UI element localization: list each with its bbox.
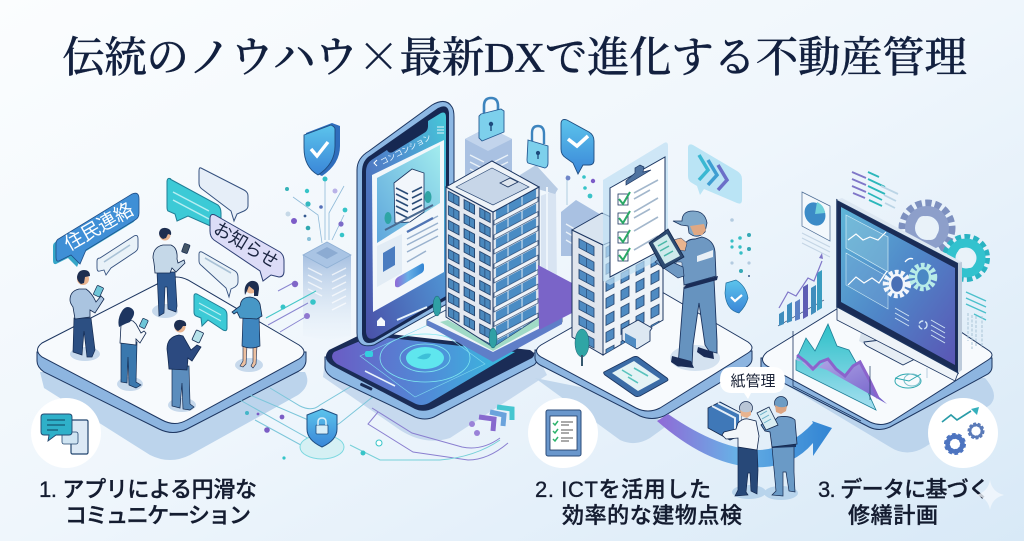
speech bubble: teal <box>167 178 221 229</box>
panel: app communication <box>31 168 307 528</box>
code lines floating <box>852 172 898 208</box>
worker in blue <box>757 396 798 500</box>
speech bubble: small left <box>97 235 138 275</box>
platform 2 shadow <box>535 378 668 443</box>
bottom workers <box>708 396 798 500</box>
phone screen building image <box>384 169 433 230</box>
worker in white <box>722 402 766 499</box>
panel: ICT inspection <box>528 142 752 528</box>
server tower <box>303 242 351 340</box>
icon: tablet checklist <box>528 398 598 468</box>
platform 3 shadow <box>783 370 994 452</box>
building 2 <box>572 213 663 366</box>
shield check right <box>725 280 748 313</box>
speech bubble: small teal <box>194 294 227 331</box>
inspection worker <box>649 211 720 371</box>
flat phone shadow <box>323 355 547 441</box>
transformation arrow <box>657 414 832 467</box>
speech bubble: light top <box>199 168 248 221</box>
platform 2 <box>535 292 752 418</box>
chevrons at bottom <box>479 407 512 431</box>
speech bubble: お知らせ: お知らせ <box>210 218 282 272</box>
icon: shield top left <box>304 123 340 176</box>
caption 3: 修繕計画 <box>848 503 938 528</box>
speech bubble: small middle <box>199 252 238 297</box>
icon: lock shield small <box>300 409 344 459</box>
circuit lines left of phone <box>240 281 508 460</box>
caption 2: 効率的な建物点検 <box>562 503 742 528</box>
person: front man <box>167 320 204 412</box>
monitor charts <box>846 215 945 343</box>
data dots and circuit above tower <box>285 176 347 243</box>
platform 3 <box>761 307 992 430</box>
monitor <box>837 198 962 381</box>
platform 1 <box>37 277 306 432</box>
bar growth chart <box>778 253 824 326</box>
title: 伝統のノウハウ×最新DXで進化する不動産管理 <box>62 24 967 85</box>
speech bubble: 住民連絡 <box>53 193 139 267</box>
dark panel behind building <box>538 265 572 330</box>
data dots right <box>730 218 751 277</box>
caption 1: コミュニケーション <box>65 503 251 528</box>
紙管理 bubble: 紙管理 <box>730 372 776 390</box>
person: woman with phone <box>117 307 148 391</box>
caption 3: 3. データに基づく <box>818 477 990 502</box>
chevron bubble <box>688 144 742 204</box>
icons: padlocks <box>479 98 548 168</box>
floor tablet <box>604 356 668 396</box>
caption 2: 2. ICTを活用した <box>535 477 711 502</box>
floor gauge <box>895 368 927 388</box>
background building behind phone <box>465 127 603 290</box>
caption 1: 1. アプリによる円滑な <box>39 477 257 502</box>
icon: gears and trend <box>928 398 998 468</box>
person: left man <box>70 270 104 361</box>
clipboard checklist <box>603 142 668 285</box>
person: top man <box>152 228 190 318</box>
phone screen content <box>377 216 438 326</box>
central apartment building <box>427 161 562 362</box>
pie chart card <box>801 192 830 257</box>
binders <box>708 401 745 440</box>
紙管理 bubble <box>720 367 785 399</box>
flat phone <box>325 324 537 419</box>
side text lines <box>966 292 986 349</box>
icon: check bubble <box>561 120 595 205</box>
platform 1 shadow <box>40 372 307 460</box>
hologram on screen <box>360 324 485 397</box>
panel: data-based repair plan <box>708 172 1004 528</box>
upright phone: コンコンション <box>379 133 433 167</box>
icon: chat and phone <box>31 398 101 468</box>
area chart <box>793 324 887 421</box>
person: right woman <box>232 281 263 372</box>
speech bubble: 住民連絡: 住民連絡 <box>61 198 137 256</box>
upright phone <box>357 101 454 346</box>
sparkle <box>976 480 1004 510</box>
gears large <box>905 206 985 277</box>
